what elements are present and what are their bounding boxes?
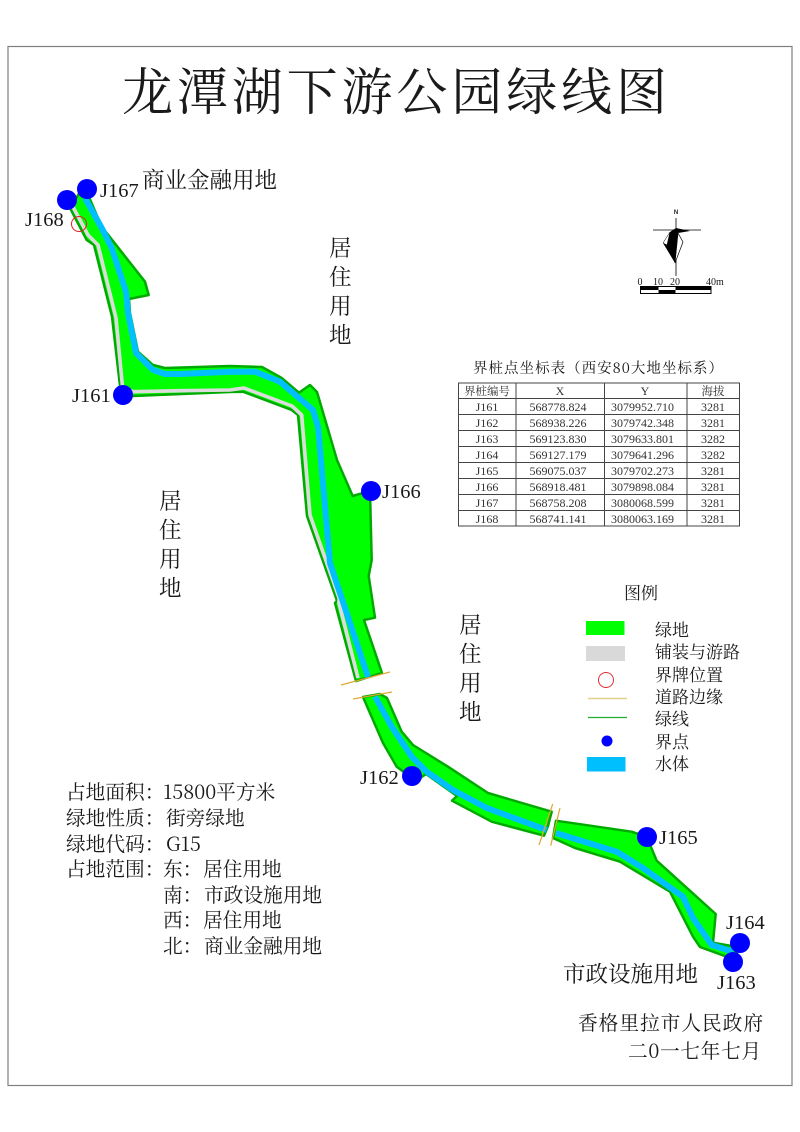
land use labels: 住 xyxy=(329,260,352,292)
land use labels: 用 xyxy=(159,542,182,574)
land use labels xyxy=(142,163,698,989)
coordinate table: J168 xyxy=(476,512,498,526)
site information block: 南： xyxy=(163,879,202,908)
site information block xyxy=(66,776,322,959)
scale bar: 0 xyxy=(638,277,642,288)
green area: south section xyxy=(553,821,737,957)
coordinate table: 568918.481 xyxy=(530,480,586,494)
compass xyxy=(653,210,701,276)
coordinate table: 3079633.801 xyxy=(611,432,674,446)
coordinate table: J167 xyxy=(476,496,498,510)
coordinate table: 3282 xyxy=(701,432,725,446)
coordinate table: 3079898.084 xyxy=(611,480,674,494)
coordinate table: 3079952.710 xyxy=(611,400,674,414)
site information block: 街旁绿地 xyxy=(166,802,245,831)
water body: north section xyxy=(85,198,368,677)
site information block: 占地面积： xyxy=(66,776,164,805)
legend: road edge xyxy=(588,683,723,708)
green area: middle section xyxy=(363,694,552,836)
coordinate table: 3282 xyxy=(701,448,725,462)
compass: N xyxy=(674,210,678,216)
legend: green space: 绿地 xyxy=(655,616,689,641)
legend xyxy=(586,579,740,775)
coordinate table: 3080068.599 xyxy=(611,496,674,510)
scale bar: 40m xyxy=(706,277,724,288)
land use labels: 用 xyxy=(459,666,482,698)
legend: sign position xyxy=(598,661,723,688)
coordinate table: 3079702.273 xyxy=(611,464,674,478)
map: green belt xyxy=(70,192,737,957)
green area: north section xyxy=(70,192,382,681)
coordinate table heading: 界桩点坐标表（西安80大地坐标系） xyxy=(473,357,723,378)
boundary points xyxy=(57,179,750,972)
coordinate table: 568741.141 xyxy=(530,512,586,526)
issuer and date: 香格里拉市人民政府 xyxy=(578,1007,763,1036)
coordinate table: J164 xyxy=(476,448,498,462)
boundary point labels: J164 xyxy=(726,912,765,934)
legend: boundary point: 界点 xyxy=(655,728,690,753)
site information block: 北： xyxy=(163,930,202,959)
legend: green line: 绿线 xyxy=(655,705,689,730)
boundary point labels: J167 xyxy=(100,180,139,202)
legend: sign position: 界牌位置 xyxy=(655,661,723,686)
water body: south section xyxy=(556,833,733,952)
water body: middle section xyxy=(375,697,547,830)
land use labels: 地 xyxy=(329,318,352,350)
legend: green space xyxy=(586,616,689,641)
site information block: 15800平方米 xyxy=(163,776,276,805)
site information block: 占地范围： xyxy=(66,853,164,882)
land use labels: 住 xyxy=(459,637,482,669)
scale bar: 10 xyxy=(653,277,663,288)
road edge lines xyxy=(341,672,560,846)
coordinate table: 568758.208 xyxy=(530,496,586,510)
coordinate table: J163 xyxy=(476,432,498,446)
land use labels: 地 xyxy=(159,571,182,603)
coordinate table: Y xyxy=(641,384,650,398)
title: 龙潭湖下游公园绿线图 xyxy=(122,51,667,125)
site information block: 绿地代码： xyxy=(66,828,164,857)
scale bar xyxy=(638,277,724,294)
legend heading: 图例 xyxy=(624,579,658,604)
coordinate table: 3281 xyxy=(701,464,725,478)
sign position marker xyxy=(72,216,86,232)
coordinate table: 海拔 xyxy=(702,384,725,398)
boundary point labels: J162 xyxy=(360,767,399,789)
coordinate table: 3079742.348 xyxy=(611,416,674,430)
land use labels: 商业金融用地 xyxy=(142,163,277,195)
land use labels: 居 xyxy=(459,608,482,640)
land use labels: 住 xyxy=(159,513,182,545)
boundary point labels: J166 xyxy=(382,481,421,503)
site information block: 东： xyxy=(163,853,202,882)
paving path: north section xyxy=(73,207,358,678)
land use labels: 居 xyxy=(329,231,352,263)
coordinate table: 569127.179 xyxy=(530,448,586,462)
boundary point labels: J168 xyxy=(25,209,64,231)
coordinate table: 568778.824 xyxy=(530,400,586,414)
legend: boundary point xyxy=(602,728,690,753)
coordinate table xyxy=(458,383,740,526)
coordinate table: 569075.037 xyxy=(530,464,586,478)
coordinate table: J161 xyxy=(476,400,498,414)
site information block: 居住用地 xyxy=(203,853,282,882)
site information block: G15 xyxy=(166,828,201,857)
land use labels: 地 xyxy=(459,695,482,727)
coordinate table: 3281 xyxy=(701,416,725,430)
land use labels: 用 xyxy=(329,289,352,321)
coordinate table: 3080063.169 xyxy=(611,512,674,526)
boundary point labels xyxy=(25,180,765,994)
legend: road edge: 道路边缘 xyxy=(655,683,723,708)
site information block: 居住用地 xyxy=(203,904,282,933)
issuer and date: 二0一七年七月 xyxy=(628,1035,761,1064)
coordinate table: 569123.830 xyxy=(530,432,586,446)
legend: water: 水体 xyxy=(655,750,689,775)
issuer and date xyxy=(578,1007,763,1064)
scale bar: 20 xyxy=(670,277,680,288)
coordinate table: J162 xyxy=(476,416,498,430)
legend: water xyxy=(587,750,689,775)
site information block: 绿地性质： xyxy=(66,802,164,831)
land use labels: 市政设施用地 xyxy=(563,957,698,989)
coordinate table: 3281 xyxy=(701,480,725,494)
boundary point labels: J163 xyxy=(717,972,756,994)
coordinate table: X xyxy=(556,384,565,398)
site information block: 商业金融用地 xyxy=(204,930,322,959)
legend: green line xyxy=(588,705,689,730)
legend: paving: 铺装与游路 xyxy=(655,638,740,663)
site information block: 西： xyxy=(163,904,202,933)
coordinate table: 568938.226 xyxy=(530,416,586,430)
coordinate table: 3281 xyxy=(701,496,725,510)
coordinate table: 3281 xyxy=(701,512,725,526)
coordinate table: J166 xyxy=(476,480,498,494)
coordinate table: 3079641.296 xyxy=(611,448,674,462)
coordinate table: 3281 xyxy=(701,400,725,414)
site information block: 市政设施用地 xyxy=(204,879,322,908)
boundary point labels: J161 xyxy=(72,385,111,407)
land use labels: 居 xyxy=(159,484,182,516)
coordinate table: 界桩编号 xyxy=(464,384,510,398)
coordinate table: J165 xyxy=(476,464,498,478)
boundary point labels: J165 xyxy=(659,827,698,849)
legend: paving xyxy=(586,638,740,663)
